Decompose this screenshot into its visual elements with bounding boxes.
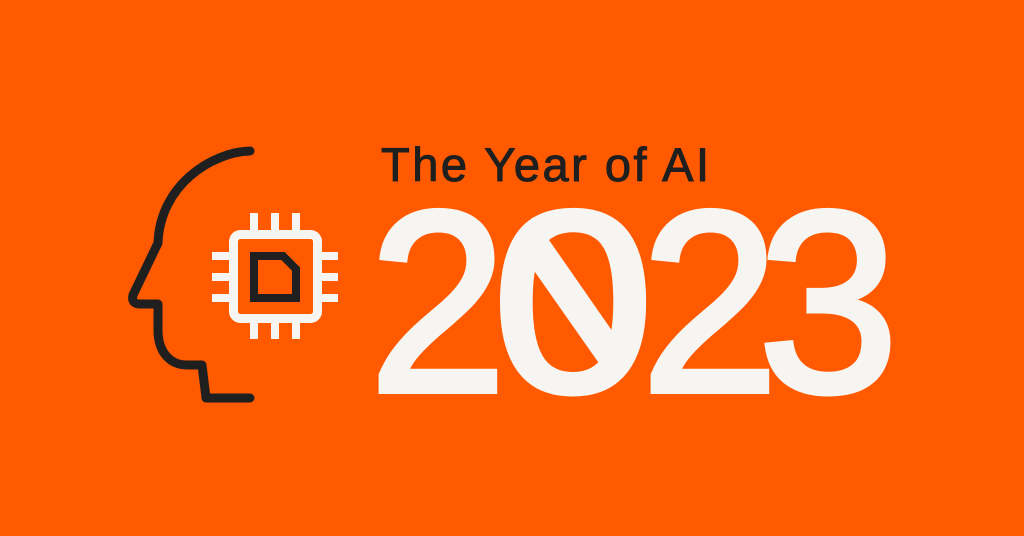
- digit 2: 2: [369, 157, 507, 446]
- zero slash: [516, 217, 631, 379]
- digit 3: 3: [758, 159, 899, 447]
- head outline: [133, 151, 250, 398]
- chip body and pins: [212, 213, 338, 339]
- icon: head profile with chip: [133, 151, 338, 398]
- digit 0: 0: [492, 159, 654, 446]
- digit 2: 2: [641, 157, 779, 446]
- title: The Year of AI: [381, 138, 709, 191]
- chip core: [254, 256, 296, 298]
- year 2023: [369, 157, 899, 447]
